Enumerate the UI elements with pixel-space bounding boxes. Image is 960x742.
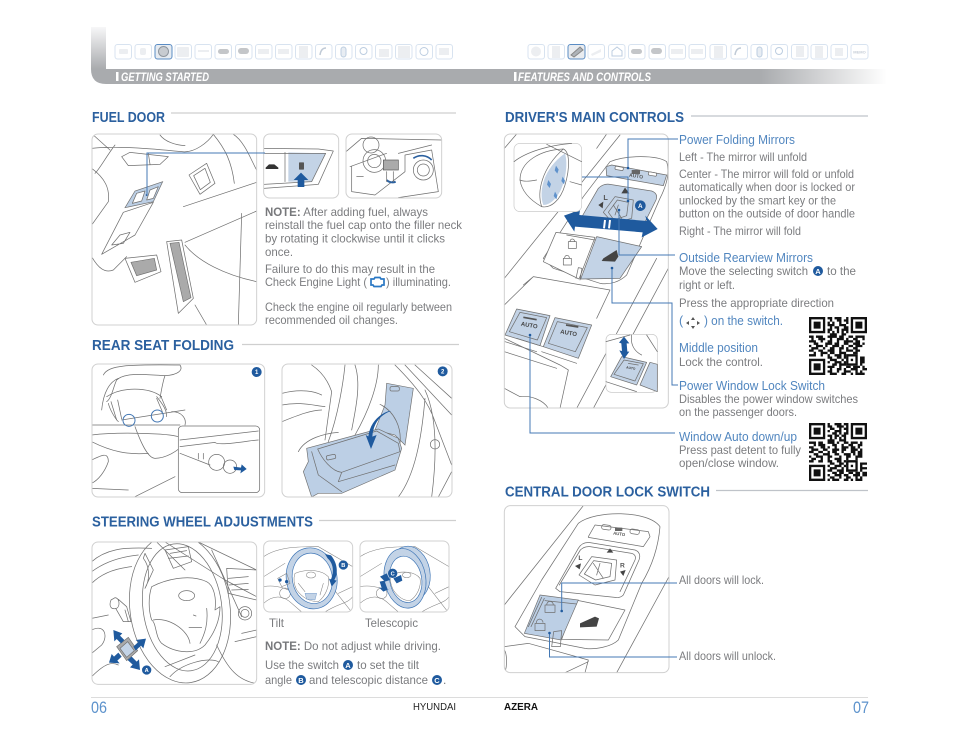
text block: outside rearview mirrors: to the	[827, 264, 856, 278]
icon: check engine light	[371, 278, 384, 286]
panel: rear seat release	[92, 364, 265, 497]
heading: rear seat folding: REAR SEAT FOLDING	[92, 338, 234, 354]
text block: window auto down/up: Window Auto down/up	[679, 430, 797, 444]
text block: fuel note	[265, 205, 463, 327]
page number 06: 06	[91, 698, 107, 717]
text block: power window lock switch: on the passenger doors.	[679, 405, 797, 419]
text block: middle position	[679, 341, 763, 369]
text block: window auto down/up: Press past detent to fully	[679, 443, 801, 457]
icon row: right page navigation	[528, 44, 868, 59]
icon row: right page navigation: MEMO	[853, 50, 866, 54]
text block: fuel note: by rotating it clockwise until it clicks	[265, 232, 445, 246]
text block: outside rearview mirrors: Press the appropriate direction	[679, 296, 834, 310]
text block: outside rearview mirrors: Outside Rearview Mirrors	[679, 251, 813, 265]
panel: central door lock switch illustration: AUTO	[613, 531, 626, 537]
panel: driver door switch illustration: A	[638, 203, 643, 210]
panel: rear seat fold-down: 2	[441, 369, 445, 375]
panel: telescopic adjustment	[360, 541, 449, 613]
text block: steering note: angle	[265, 673, 292, 687]
panel: central door lock switch illustration	[504, 506, 669, 673]
text block: fuel note: NOTE: After adding fuel, always	[265, 205, 428, 219]
panel: tilt adjustment: B	[341, 563, 345, 569]
panel: central door lock switch illustration: L	[578, 555, 582, 562]
QR code: lower	[809, 423, 867, 481]
panel: steering wheel switch: A	[145, 668, 149, 674]
text block: outside rearview mirrors: A	[815, 267, 821, 276]
panel: driver door switch illustration: AUTO	[560, 329, 578, 338]
text block: outside rearview mirrors: Move the selecting switch	[679, 264, 808, 278]
text block: fuel note: Failure to do this may result in the	[265, 262, 435, 276]
text block: middle position: Middle position	[679, 341, 758, 355]
text block: fuel note: reinstall the fuel cap onto the filler neck	[265, 218, 463, 232]
text block: power window lock switch	[679, 379, 858, 419]
text block: power folding mirrors: Left - The mirror will unfold	[679, 150, 807, 164]
brand: hyundai: HYUNDAI	[413, 702, 456, 713]
label: telescopic: Telescopic	[365, 616, 418, 630]
text block: power folding mirrors: Right - The mirror will fold	[679, 224, 801, 238]
footer	[91, 698, 869, 717]
text block: middle position: Lock the control.	[679, 355, 763, 369]
text block: steering note: NOTE: Do not adjust while driving.	[265, 639, 441, 653]
heading: steering wheel adjustments: STEERING WHEEL ADJUSTMENTS	[92, 514, 313, 530]
text block: window auto down/up: open/close window.	[679, 456, 779, 470]
text block: outside rearview mirrors: (	[679, 314, 684, 328]
text block: outside rearview mirrors: ) on the switch.	[704, 314, 783, 328]
text block: power folding mirrors: Power Folding Mirrors	[679, 133, 795, 147]
leader lines: central door lock	[548, 583, 677, 657]
text block: fuel note: recommended oil changes.	[265, 313, 398, 327]
text block: fuel note: once.	[265, 245, 293, 259]
text block: power folding mirrors: Center - The mirror will fold or unfold	[679, 167, 854, 181]
section tab: getting started: GETTING STARTED	[121, 72, 209, 84]
leader lines: driver's controls	[529, 139, 678, 433]
text: all doors will unlock: All doors will unlock.	[679, 649, 776, 663]
text block: power window lock switch: Power Window Lock Switch	[679, 379, 825, 393]
panel: rear seat release: 1	[255, 370, 259, 376]
panel: driver door switch illustration: AUTO	[629, 173, 643, 181]
panel: driver door switch illustration: L	[603, 193, 608, 202]
text block: fuel note: Check the engine oil regularly between	[265, 300, 452, 314]
text block: window auto down/up	[679, 430, 801, 470]
text block: power folding mirrors: button on the outside of door handle	[679, 206, 855, 220]
text block: power folding mirrors	[679, 133, 855, 238]
text block: outside rearview mirrors: right or left.	[679, 278, 735, 292]
icon: direction arrows	[686, 317, 700, 329]
text block: steering note: to set the tilt	[357, 658, 420, 672]
heading: driver's main controls: DRIVER'S MAIN CONTROLS	[505, 110, 684, 126]
heading: central door lock switch: CENTRAL DOOR LOCK SWITCH	[505, 484, 710, 500]
header band	[91, 27, 887, 84]
panel: telescopic adjustment: C	[391, 571, 395, 577]
text block: outside rearview mirrors	[679, 251, 856, 329]
text block: fuel note: ) illuminating.	[386, 275, 451, 289]
panel: fuel door button close-up	[264, 134, 339, 198]
panel: driver door switch illustration: AUTO	[520, 322, 538, 331]
text block: steering note: .	[443, 673, 446, 687]
text block: steering note	[265, 639, 446, 687]
text block: steering note: and telescopic distance	[309, 673, 428, 687]
leader line: fuel door	[147, 153, 265, 195]
brand: azera: AZERA	[504, 702, 538, 713]
panel: tilt adjustment	[264, 541, 353, 613]
text block: steering note: Use the switch	[265, 658, 339, 672]
page number 07: 07	[853, 698, 869, 717]
panel: steering wheel switch	[92, 542, 258, 685]
heading: fuel door: FUEL DOOR	[92, 110, 165, 126]
text block: power window lock switch: Disables the power window switches	[679, 392, 858, 406]
text: all doors will lock: All doors will lock.	[679, 573, 764, 587]
section tab: features and controls: FEATURES AND CONTROLS	[518, 72, 651, 84]
text block: steering note: A	[345, 661, 351, 670]
icon row: left page navigation	[115, 44, 452, 59]
panel: driver door switch illustration: AUTO	[626, 365, 636, 371]
panel: rear seat fold-down	[282, 364, 452, 497]
panel: driver door switch illustration	[504, 134, 668, 408]
text block: fuel note: Check Engine Light (	[265, 275, 367, 289]
panel: fuel door location illustration	[92, 134, 257, 325]
label: tilt: Tilt	[269, 616, 285, 630]
panel: central door lock switch illustration: R	[620, 562, 625, 569]
text block: power folding mirrors: unlocked by the smart key or the	[679, 194, 836, 208]
text block: power folding mirrors: automatically when door is locked or	[679, 180, 855, 194]
panel: fuel cap illustration	[346, 134, 442, 198]
text block: steering note: C	[434, 676, 440, 685]
text block: steering note: B	[298, 676, 304, 685]
QR code: upper	[809, 317, 867, 375]
